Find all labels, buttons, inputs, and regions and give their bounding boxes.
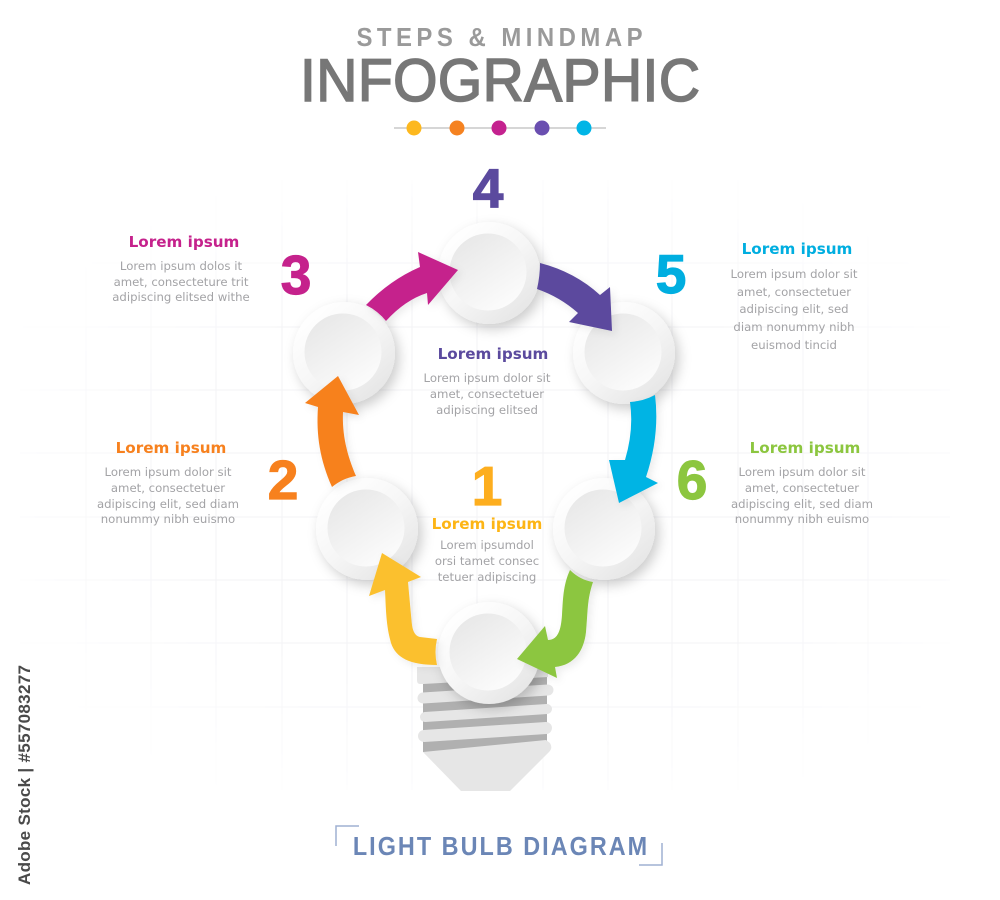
light bulb base [417, 667, 551, 791]
text block 4: adipiscing elitsed [436, 403, 538, 417]
text block 1: Lorem ipsum [432, 515, 542, 533]
text block 1: tetuer adipiscing [438, 570, 536, 584]
text block 6: amet, consectetuer [745, 481, 859, 495]
number 5: 5 [656, 243, 686, 305]
text block 3: Lorem ipsum [129, 233, 239, 251]
text block 4: amet, consectetuer [430, 387, 544, 401]
circle 1 [438, 602, 540, 704]
text block 6: adipiscing elit, sed diam [731, 497, 873, 511]
text block 3 [112, 233, 250, 304]
arrow 4: purple [537, 263, 612, 331]
number 4: 4 [473, 157, 504, 219]
text block 2: nonummy nibh euismo [101, 512, 235, 526]
arrow 6: green [517, 570, 593, 678]
text block 2: amet, consectetuer [111, 481, 225, 495]
text block 3: Lorem ipsum dolos it [120, 259, 242, 273]
text block 4: Lorem ipsum dolor sit [424, 371, 551, 385]
text block 2: Lorem ipsum [116, 439, 226, 457]
circle 5 [573, 302, 675, 404]
text block 2: adipiscing elit, sed diam [97, 497, 239, 511]
text block 5: amet, consectetuer [737, 285, 851, 299]
arrow 5: cyan [609, 395, 658, 503]
text block 5: Lorem ipsum dolor sit [731, 267, 858, 281]
text block 4 [424, 345, 551, 417]
text block 1: Lorem ipsumdol [440, 538, 534, 552]
footer caption with brackets: LIGHT BULB DIAGRAM [353, 833, 647, 861]
text block 5: diam nonummy nibh [733, 320, 855, 334]
title: infographic: INFOGRAPHIC [300, 48, 700, 114]
circle 6 [553, 478, 655, 580]
text block 6 [731, 439, 873, 526]
text block 6: Lorem ipsum [750, 439, 860, 457]
number 6: 6 [677, 449, 707, 511]
circle 2 [316, 478, 418, 580]
arrow 3: magenta [366, 252, 458, 321]
number 3: 3 [281, 244, 311, 306]
text block 4: Lorem ipsum [438, 345, 548, 363]
circle 3 [293, 302, 395, 404]
text block 1 [432, 515, 542, 584]
footer caption with brackets [336, 826, 662, 865]
number 1: 1 [472, 455, 502, 517]
side credit text: Adobe Stock | #557083277 [15, 665, 34, 885]
text block 3: adipiscing elitsed withe [112, 290, 250, 304]
text block 6: nonummy nibh euismo [735, 512, 869, 526]
text block 1: orsi tamet consec [435, 554, 539, 568]
arrow 1: yellow [369, 553, 437, 665]
text block 5: Lorem ipsum [742, 240, 852, 258]
text block 3: amet, consecteture trit [114, 275, 249, 289]
text block 2: Lorem ipsum dolor sit [105, 465, 232, 479]
text block 2 [97, 439, 239, 526]
colour dots row [394, 120, 606, 136]
heading: steps and mindmap: STEPS & MINDMAP [356, 23, 643, 52]
number 2: 2 [268, 449, 298, 511]
text block 5: adipiscing elit, sed [739, 302, 849, 316]
text block 5: euismod tincid [751, 338, 837, 352]
text block 5 [731, 240, 858, 352]
circle 4 [438, 222, 540, 324]
text block 6: Lorem ipsum dolor sit [739, 465, 866, 479]
arrow 2: orange [305, 376, 359, 487]
